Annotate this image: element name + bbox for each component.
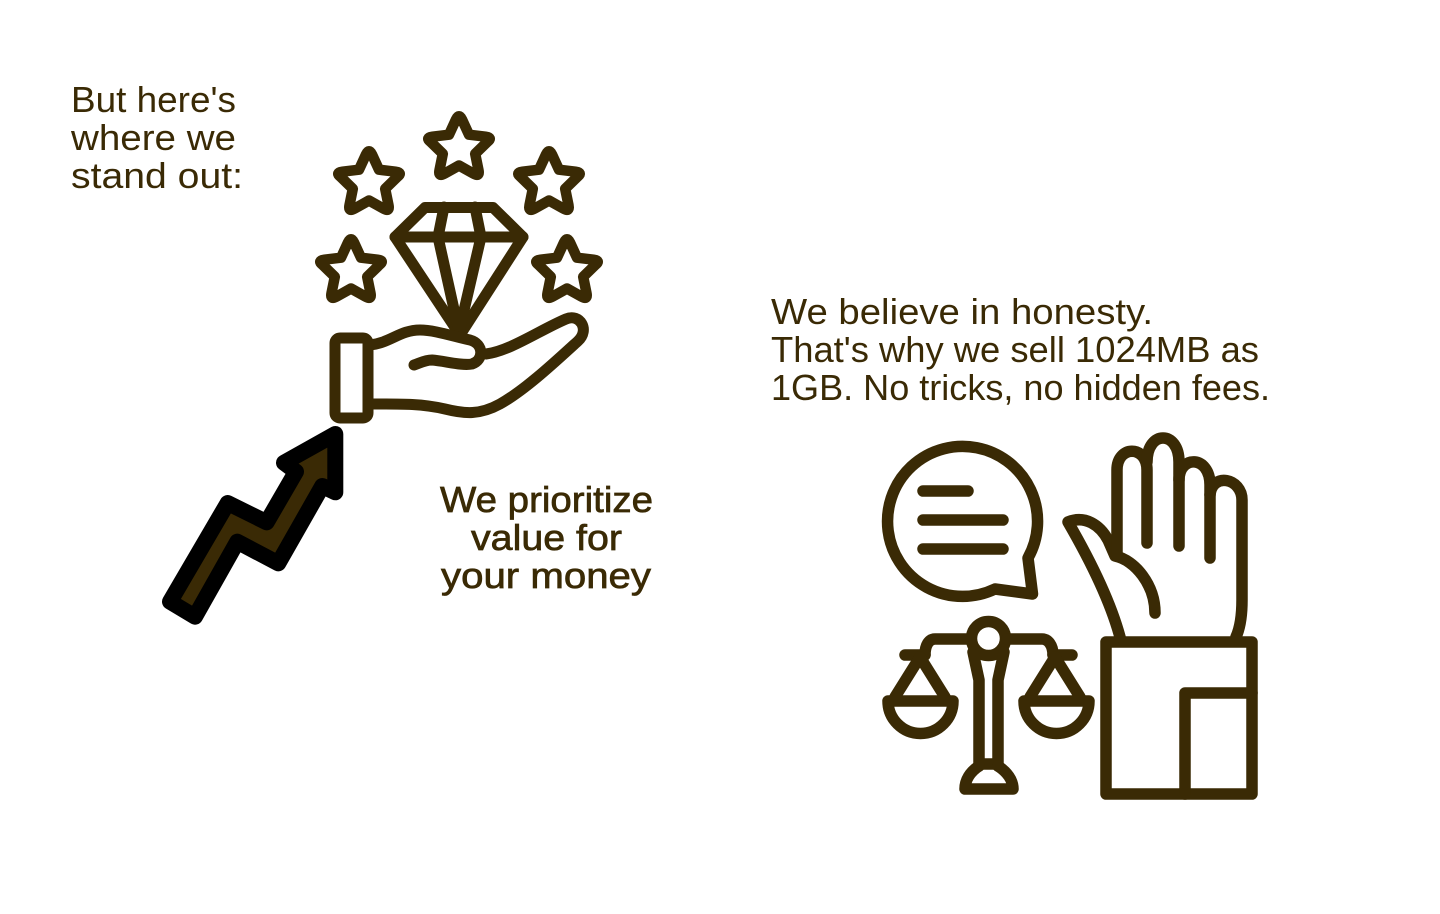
stars: [320, 116, 598, 298]
hand: [335, 318, 583, 418]
text: We believe in honesty: We believe in honesty.: [771, 291, 1153, 332]
heading: But here's where we stand out: where we: [70, 117, 236, 158]
arrow: rising zigzag: [170, 434, 335, 617]
text: We prioritize value for your money: your money: [441, 555, 651, 596]
icon: honesty oath with speech bubble, scales and raised hand: [888, 438, 1252, 794]
raised hand and cuff: [1068, 438, 1252, 794]
heading: But here's where we stand out: But here's: [71, 79, 236, 120]
text: We believe in honesty: 1GB. No tricks, no hidden fees.: [771, 367, 1270, 408]
text: We prioritize value for your money: We prioritize: [440, 479, 653, 520]
heading: But here's where we stand out: [70, 79, 243, 196]
scales: [888, 622, 1089, 789]
text: We believe in honesty: [771, 291, 1270, 408]
heading: But here's where we stand out: stand out:: [71, 155, 243, 196]
speech bubble: [888, 446, 1038, 596]
text: We prioritize value for your money: value for: [471, 517, 622, 558]
text: We prioritize value for your money: [440, 479, 653, 596]
diamond: [395, 207, 523, 335]
icon: diamond on a hand with five stars: [320, 116, 598, 418]
text: We believe in honesty: That's why we sell 1024MB as: [771, 329, 1259, 370]
